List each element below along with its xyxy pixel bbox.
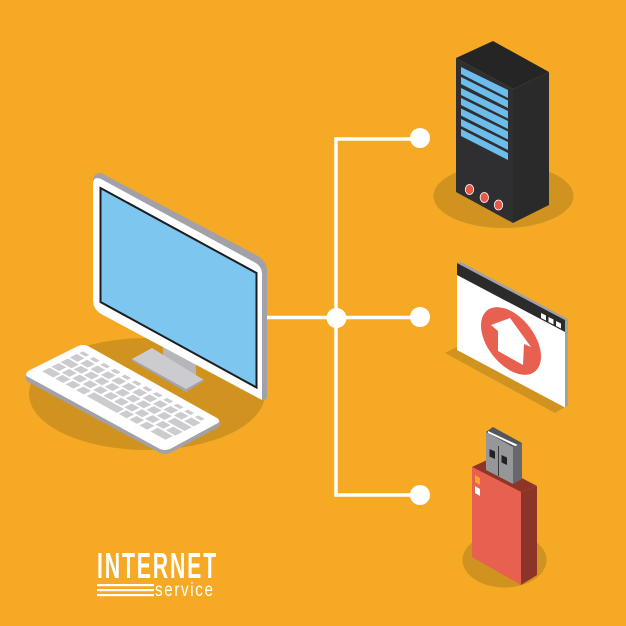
logo stripes [97, 584, 154, 596]
screen [100, 188, 256, 388]
window shadow [445, 347, 565, 413]
window title bar [457, 263, 565, 332]
keyboard [26, 345, 220, 454]
connector network [267, 128, 430, 505]
server buttons [465, 184, 503, 210]
usb indicators [475, 475, 480, 485]
logo title: INTERNET [97, 546, 216, 587]
monitor [93, 173, 267, 400]
upload icon [481, 295, 541, 387]
server vents [461, 67, 508, 160]
logo subtitle: service [155, 578, 213, 600]
server shadow [434, 164, 574, 228]
upload window [445, 262, 568, 413]
logo [97, 546, 216, 600]
computer [26, 173, 267, 454]
server tower [456, 41, 549, 223]
server [434, 41, 574, 228]
usb connector [486, 427, 522, 484]
usb body [472, 460, 537, 585]
monitor stand [132, 345, 204, 392]
keys [42, 351, 207, 440]
usb drive [462, 427, 546, 588]
usb shadow [462, 532, 546, 588]
window frame [457, 262, 568, 408]
computer shadow [29, 338, 265, 450]
